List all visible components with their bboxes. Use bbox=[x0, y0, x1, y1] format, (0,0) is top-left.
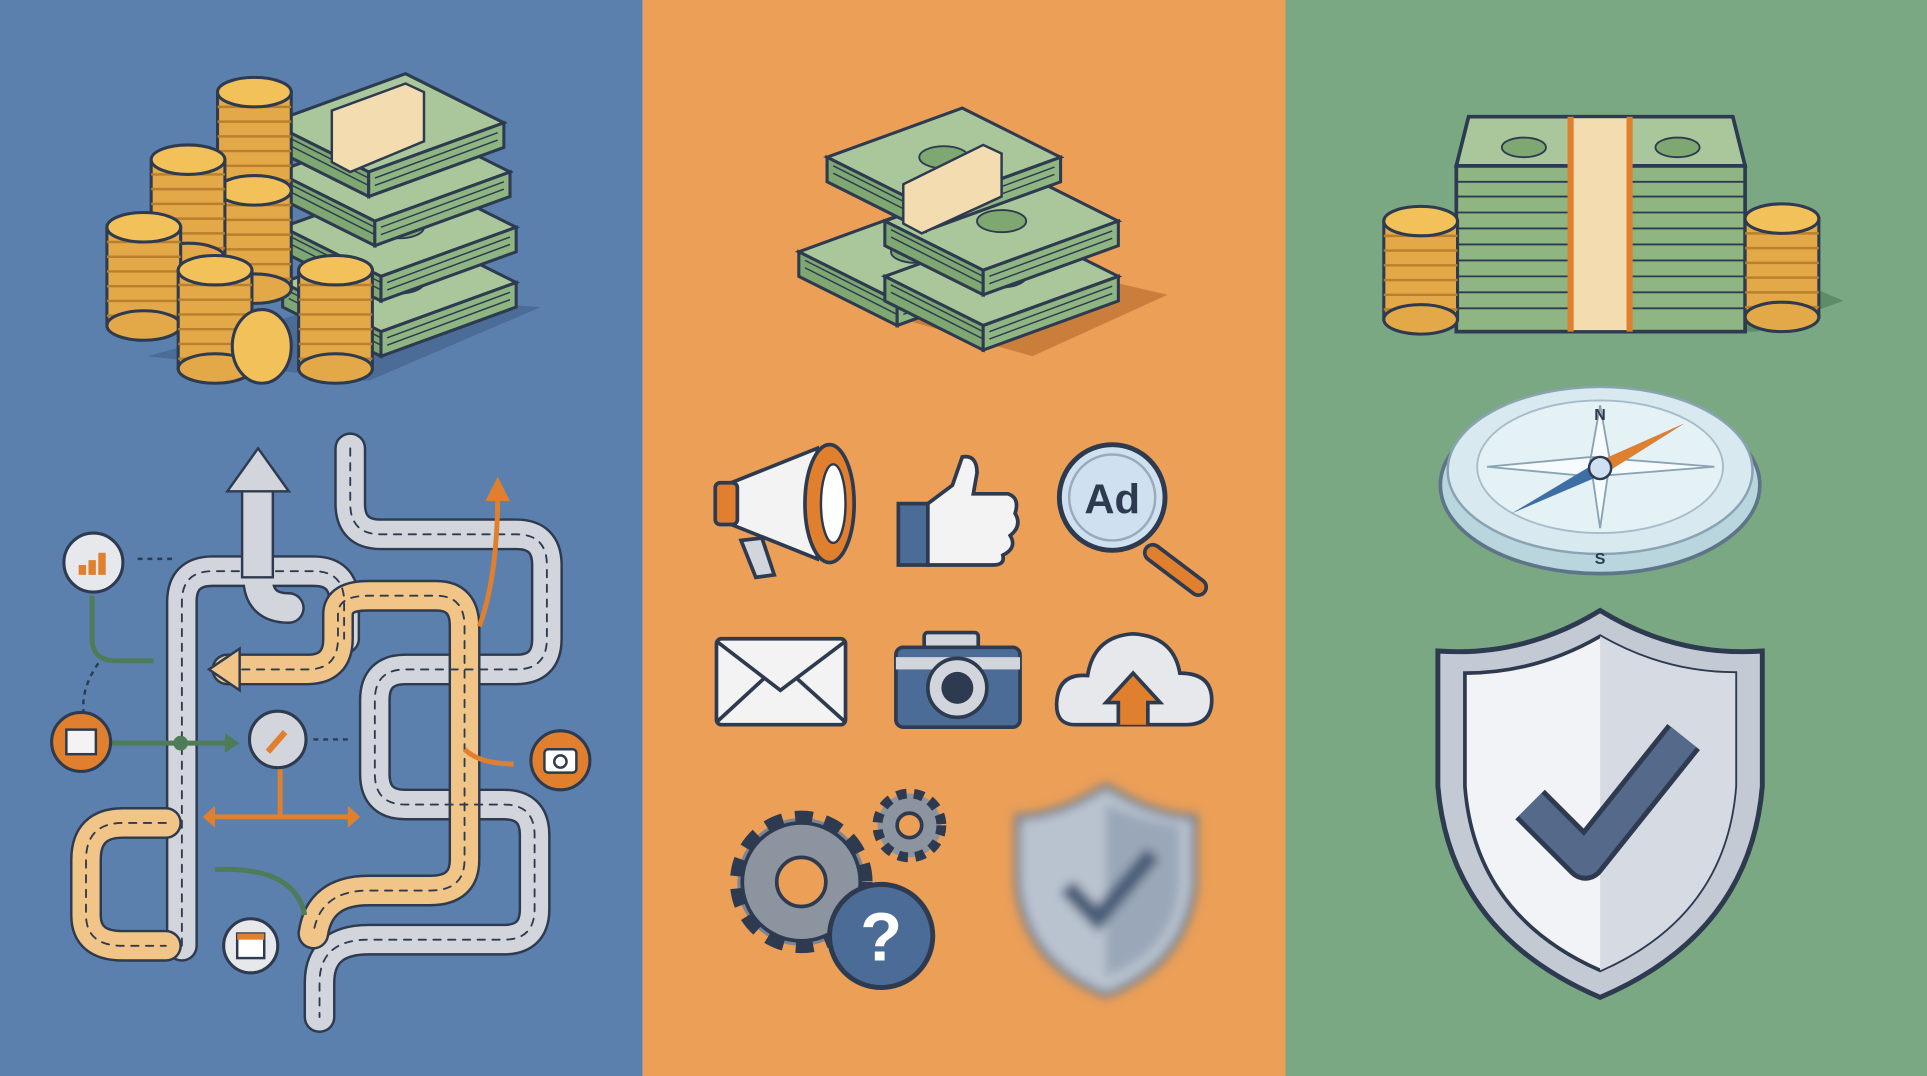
icon: calendar badge bbox=[224, 919, 278, 973]
icon: compass: S bbox=[1595, 551, 1606, 568]
icon: gears with question bbox=[737, 793, 941, 988]
icon: compass bbox=[1440, 387, 1760, 574]
roads maze bbox=[86, 448, 547, 1017]
icon: camera badge bbox=[531, 731, 590, 790]
panel: blue bbox=[0, 0, 643, 1076]
icon: wrench badge bbox=[249, 711, 306, 768]
panel: green bbox=[1285, 0, 1927, 1076]
icon: megaphone bbox=[715, 445, 854, 577]
icon: compass: N bbox=[1594, 407, 1606, 424]
arrows in maze bbox=[83, 448, 514, 915]
icon: cloud upload bbox=[1057, 634, 1212, 725]
icon: envelope bbox=[716, 639, 846, 725]
icon: magnifier Ad bbox=[1059, 445, 1198, 587]
icon: blurred shield bbox=[1018, 786, 1195, 995]
money pile: orange bbox=[799, 108, 1168, 356]
icon: thumbs up bbox=[898, 457, 1018, 565]
icon: chart badge bbox=[64, 533, 123, 592]
icon: document badge bbox=[52, 712, 111, 771]
icon: camera bbox=[896, 633, 1020, 727]
icon: magnifier Ad: Ad bbox=[1084, 475, 1140, 522]
money pile: blue bbox=[107, 74, 541, 383]
icon: gears with question: ? bbox=[860, 899, 902, 976]
panel: orange bbox=[643, 0, 1285, 1076]
icon: large shield bbox=[1438, 610, 1762, 997]
money pile: green bbox=[1384, 117, 1843, 334]
